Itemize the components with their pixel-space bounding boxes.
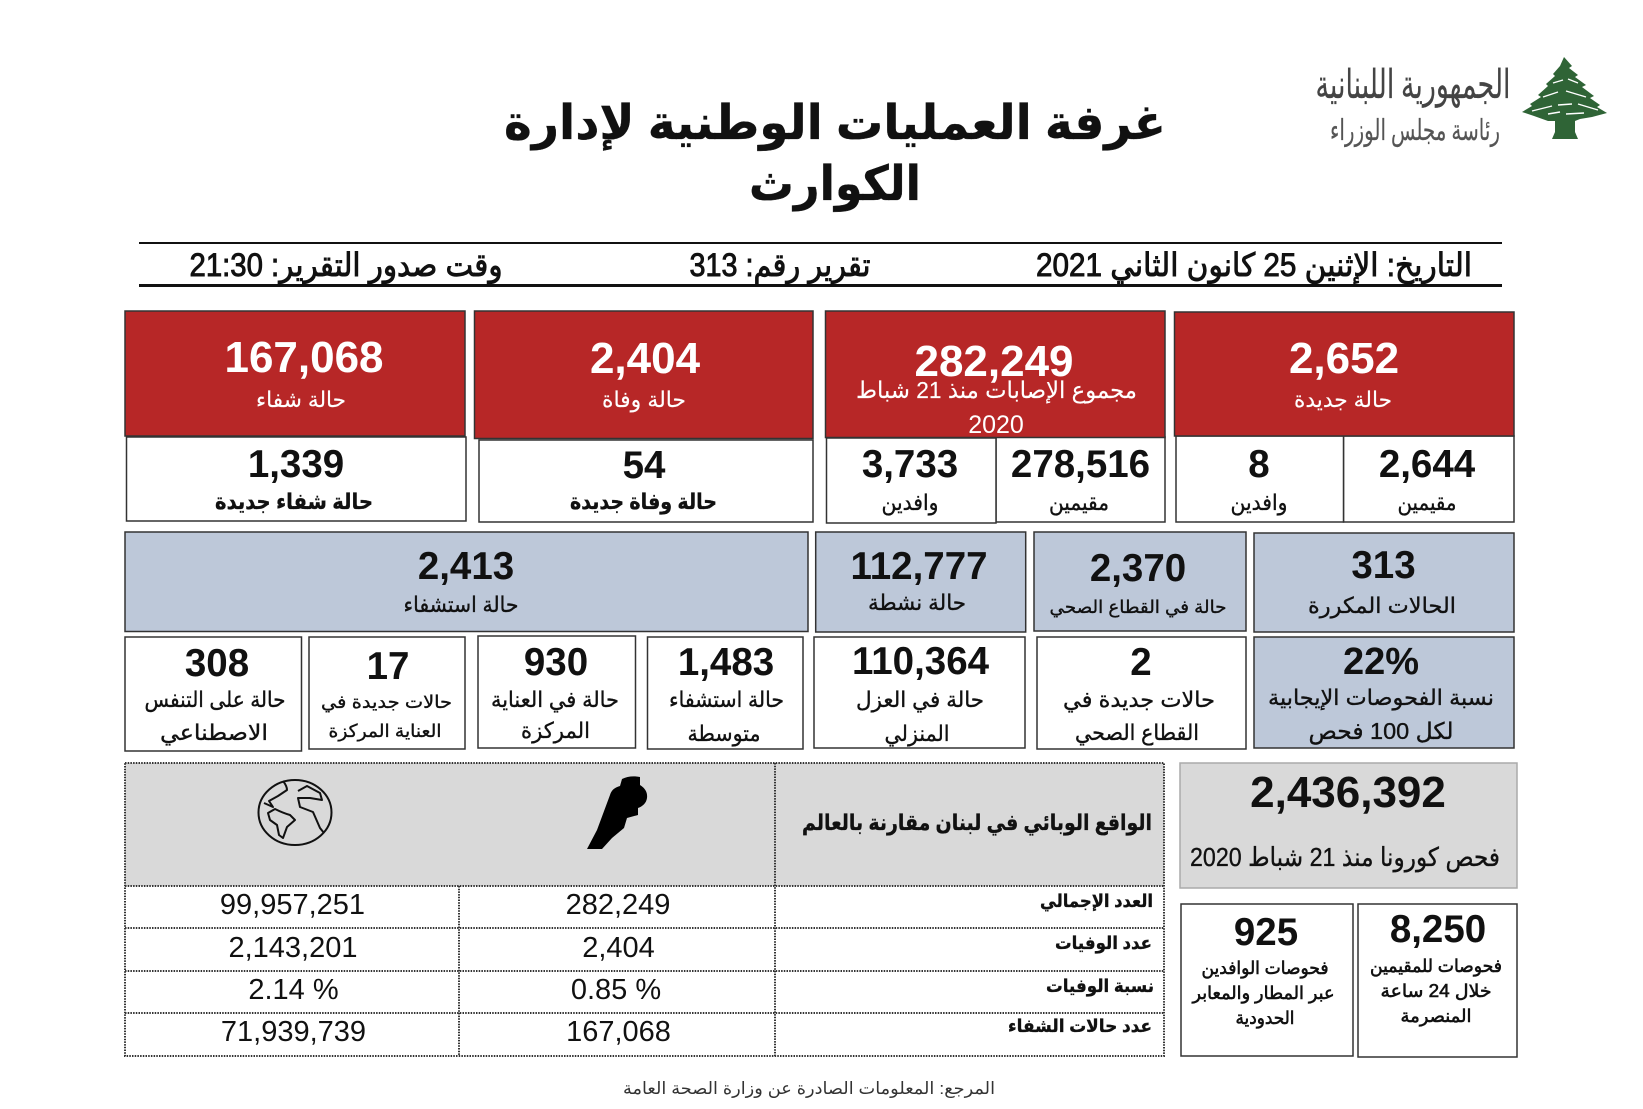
panel: resident tests: 8,250 [1390, 908, 1486, 951]
panel: new healthcare sector cases: 2 [1130, 641, 1152, 684]
row: deaths: 2,143,201 [228, 932, 358, 964]
panel: healthcare sector cases: 2,370 [1090, 547, 1186, 590]
title [504, 97, 1166, 212]
panel: recoveries: حالة شفاء [256, 387, 346, 412]
new deaths: 54 [623, 444, 666, 487]
panel: new ICU cases: العناية المركزة [328, 721, 442, 742]
new recoveries: 1,339 [248, 443, 344, 486]
title: غرفة العمليات الوطنية لإدارة [504, 97, 1166, 151]
panel: new cases: حالة جديدة [1294, 387, 1392, 412]
panel: total cases: وافدين [882, 490, 938, 515]
panel: home isolation: المنزلي [884, 721, 950, 747]
panel: deaths: حالة وفاة جديدة [570, 489, 717, 515]
panel: new healthcare sector cases [1037, 637, 1246, 749]
logo text: الجمهورية اللبنانية [1316, 62, 1510, 108]
row: deaths [228, 932, 1152, 964]
panel: recoveries [125, 311, 466, 521]
panel: moderate hospital cases [648, 637, 803, 749]
panel: resident tests: خلال 24 ساعة [1380, 981, 1492, 1001]
panel: hospitalised: 2,413 [418, 545, 514, 588]
icon: map of Lebanon [587, 776, 647, 849]
panel: active cases [816, 532, 1026, 632]
arrivals: 3,733 [862, 443, 958, 486]
panel: on ventilator: الاصطناعي [160, 720, 268, 746]
total cases number: 282,249 [914, 337, 1074, 386]
panel: home isolation: حالة في العزل [856, 687, 984, 713]
panel: recoveries: حالة شفاء جديدة [215, 489, 373, 514]
panel: total tests: فحص كورونا منذ 21 شباط 2020 [1190, 842, 1500, 873]
table: Lebanon compared with the world [125, 763, 1164, 1056]
panel: hospitalised [125, 532, 808, 632]
panel: arrivals tests [1181, 904, 1353, 1056]
panel: new cases [1174, 312, 1514, 522]
panel: on ventilator: 308 [185, 642, 249, 685]
panel: positivity rate: 22% [1343, 641, 1419, 683]
panel: arrivals tests: 925 [1234, 911, 1298, 954]
panel: new ICU cases: حالات جديدة في [321, 692, 452, 713]
logo text: رئاسة مجلس الوزراء [1330, 115, 1500, 148]
title: الكوارث [749, 158, 921, 212]
panel: new cases: وافدين [1230, 490, 1288, 515]
row: fatality rate: 2.14 % [248, 974, 339, 1006]
date: التاريخ: الإثنين 25 كانون الثاني 2021 [1036, 247, 1472, 284]
panel: duplicate cases [1254, 533, 1514, 632]
panel: hospitalised: حالة استشفاء [404, 592, 518, 617]
footer source note: المرجع: المعلومات الصادرة عن وزارة الصحة العامة [623, 1079, 995, 1099]
panel: resident tests [1358, 904, 1517, 1057]
panel: new cases: مقيمين [1398, 490, 1456, 515]
row: total [220, 889, 1153, 921]
panel: positivity rate: لكل 100 فحص [1308, 718, 1454, 745]
panel: new healthcare sector cases: حالات جديدة في [1063, 687, 1215, 713]
panel: resident tests: المنصرمة [1400, 1006, 1472, 1027]
panel: positivity rate [1254, 637, 1514, 748]
panel: active cases: 112,777 [850, 545, 988, 588]
panel: deaths [474, 311, 813, 522]
row: recoveries: 167,068 [566, 1016, 671, 1048]
panel: positivity rate: نسبة الفحوصات الإيجابية [1268, 685, 1494, 710]
panel: active cases: حالة نشطة [868, 590, 966, 615]
panel: healthcare sector cases: حالة في القطاع الصحي [1050, 597, 1226, 618]
panel: arrivals tests: الحدودية [1236, 1008, 1294, 1029]
panel: total tests [1180, 763, 1517, 888]
logo: Lebanese Republic presidency of the council of ministers [1316, 57, 1607, 148]
icon: cedar tree [1522, 57, 1607, 139]
row: deaths: عدد الوفيات [1055, 933, 1152, 954]
header bar: date, report number, time [139, 242, 1502, 287]
panel: total cases [826, 311, 1165, 523]
panel: new ICU cases [309, 637, 465, 749]
logo text [1316, 62, 1510, 148]
panel: total cases: مجموع الإصابات منذ 21 شباط [856, 377, 1137, 404]
panel: duplicate cases: 313 [1351, 544, 1416, 587]
panel: ICU cases: 930 [524, 641, 588, 684]
panel: resident tests: فحوصات للمقيمين [1370, 956, 1502, 977]
row: fatality rate: 0.85 % [571, 974, 661, 1006]
panel: moderate hospital cases: متوسطة [688, 721, 760, 746]
new cases number: 2,652 [1289, 334, 1399, 383]
panel: on ventilator: حالة على التنفس [144, 687, 286, 713]
panel: home isolation [814, 637, 1025, 748]
panel: new healthcare sector cases: القطاع الصحي [1075, 720, 1199, 746]
row: recoveries [221, 1016, 1152, 1048]
row: fatality rate [248, 974, 1154, 1006]
report time: وقت صدور التقرير: 21:30 [190, 247, 502, 284]
residents: 2,644 [1379, 443, 1476, 486]
arrivals: 8 [1248, 443, 1270, 486]
total recoveries: 167,068 [224, 333, 384, 382]
row: recoveries: 71,939,739 [221, 1016, 366, 1048]
row: total: 282,249 [566, 889, 670, 921]
panel: home isolation: 110,364 [852, 640, 990, 683]
row: total: 99,957,251 [220, 889, 365, 921]
panel: deaths: حالة وفاة [602, 387, 686, 412]
panel: ICU cases [478, 636, 636, 748]
row: total: العدد الإجمالي [1040, 891, 1153, 912]
residents: 278,516 [1011, 443, 1150, 486]
panel: arrivals tests: فحوصات الوافدين [1202, 958, 1328, 979]
panel: total cases: مقيمين [1049, 490, 1109, 515]
panel: total cases: 2020 [968, 411, 1024, 439]
panel: healthcare sector cases [1034, 532, 1246, 631]
panel: duplicate cases: الحالات المكررة [1308, 593, 1456, 618]
panel: total tests: 2,436,392 [1250, 768, 1446, 817]
total deaths: 2,404 [590, 334, 701, 383]
row: recoveries: عدد حالات الشفاء [1008, 1016, 1152, 1036]
icon: globe [258, 780, 332, 845]
row: fatality rate: نسبة الوفيات [1046, 976, 1154, 997]
panel: on ventilator [125, 637, 302, 751]
panel: new ICU cases: 17 [367, 645, 409, 688]
panel: moderate hospital cases: حالة استشفاء [669, 687, 784, 712]
panel: moderate hospital cases: 1,483 [678, 641, 774, 684]
panel: arrivals tests: عبر المطار والمعابر [1192, 983, 1334, 1004]
report number: تقرير رقم: 313 [690, 247, 870, 284]
panel: ICU cases: المركزة [521, 718, 590, 743]
panel: ICU cases: حالة في العناية [491, 687, 619, 713]
table heading: الواقع الوبائي في لبنان مقارنة بالعالم [802, 810, 1152, 836]
row: deaths: 2,404 [582, 932, 655, 964]
